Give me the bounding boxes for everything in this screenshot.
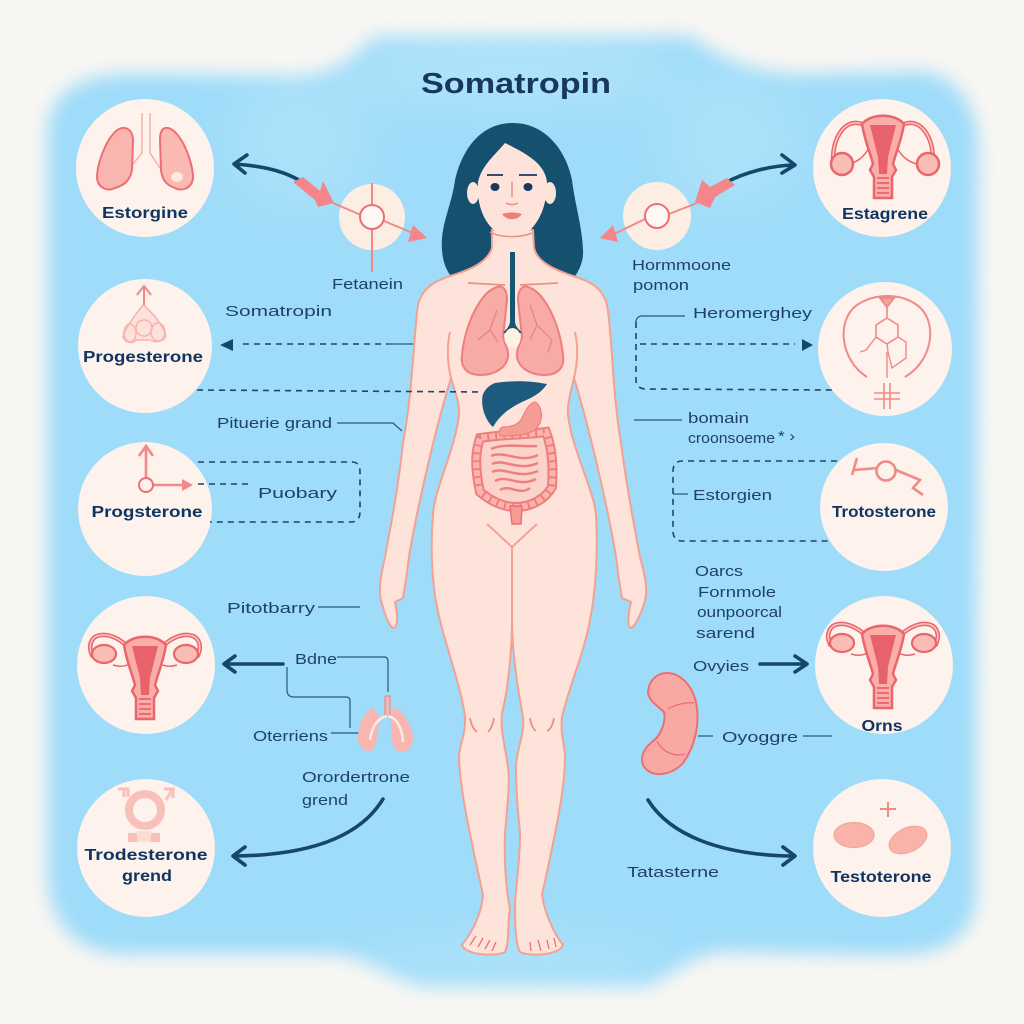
left labels: Pituerie grand [217, 415, 332, 432]
thin leader lines [287, 420, 832, 736]
liver [482, 381, 547, 427]
right labels: Estorgien [693, 487, 772, 504]
label: Trodesterone [84, 847, 208, 864]
icon: kidney [642, 673, 697, 774]
left labels: Bdne [295, 651, 337, 668]
label: Estagrene [842, 206, 928, 223]
right labels: Tatasterne [627, 864, 719, 881]
right labels: Heromerghey [693, 305, 813, 322]
left labels: Oterriens [253, 728, 328, 745]
panel: fourth-left node [77, 596, 215, 734]
panel: top-right node [813, 99, 951, 237]
body creases and joints [448, 332, 577, 620]
icon: connector [852, 458, 923, 495]
right labels: Ovyies [693, 658, 749, 675]
right labels: * › [778, 428, 795, 445]
icon: lungs [97, 113, 193, 190]
left labels: Somatropin [225, 303, 332, 320]
arrow: top right [725, 155, 795, 183]
left labels: Puobary [258, 485, 338, 502]
icon: molecule [844, 296, 930, 409]
right labels: Oyoggre [722, 729, 798, 746]
right labels: Fornmole [698, 584, 776, 601]
label: Orns [862, 718, 903, 735]
arrow: lower left [233, 799, 383, 865]
label: Progesterone [83, 349, 203, 366]
right labels: sarend [696, 625, 755, 642]
label: Progsterone [92, 504, 203, 521]
panel: fifth-left node: grend [122, 868, 172, 885]
right labels: Oarcs [695, 563, 743, 580]
small node: left hormone [293, 177, 427, 272]
right labels: croonsoeme [688, 430, 775, 447]
dashed connectors left [197, 339, 483, 522]
panel: fifth-right node [813, 779, 951, 917]
panel: second-right node [818, 282, 952, 416]
icon: small lungs left lower [358, 696, 413, 752]
stomach [499, 402, 541, 436]
small node: right hormone [600, 178, 735, 250]
title: Somatropin [421, 68, 611, 100]
dashed connectors right [636, 316, 837, 541]
body silhouette [380, 230, 646, 955]
panel: second-left node [78, 279, 212, 413]
icon: uterus [90, 635, 200, 719]
body figure [380, 123, 646, 955]
lungs [462, 252, 563, 375]
arrow: fourth right [760, 656, 807, 672]
right labels: pomon [633, 277, 689, 294]
label: Trotosterone [832, 504, 936, 521]
icon: node arrows [139, 446, 193, 492]
arrow: lower right [648, 800, 795, 865]
arrow: top left [234, 155, 305, 184]
panel: top-left lung node [76, 99, 214, 237]
right labels: ounpoorcal [697, 604, 782, 621]
panel: third-left node [78, 442, 212, 576]
toes [470, 936, 556, 951]
left labels: Pitotbarry [227, 600, 316, 617]
panel: third-right node [820, 443, 948, 571]
label: Testoterone [830, 869, 932, 886]
left labels [217, 276, 410, 809]
face [467, 143, 556, 237]
icon: gland [123, 286, 166, 342]
arrow: fourth left [224, 656, 283, 672]
panel: fifth-left node [77, 779, 215, 917]
icon: gender symbol [118, 789, 173, 842]
left labels: Fetanein [332, 276, 403, 293]
icon: uterus [831, 116, 939, 198]
left labels: grend [302, 792, 348, 809]
right labels: bomain [688, 410, 749, 427]
intestines [476, 432, 552, 524]
panel: fourth-right node [815, 596, 953, 735]
icon: uterus [828, 624, 938, 708]
hair [442, 123, 583, 278]
left labels: Orordertrone [302, 769, 410, 786]
right labels [627, 257, 813, 881]
icon: two ovals [834, 802, 931, 859]
label: Estorgine [102, 205, 188, 222]
right labels: Hormmoone [632, 257, 731, 274]
